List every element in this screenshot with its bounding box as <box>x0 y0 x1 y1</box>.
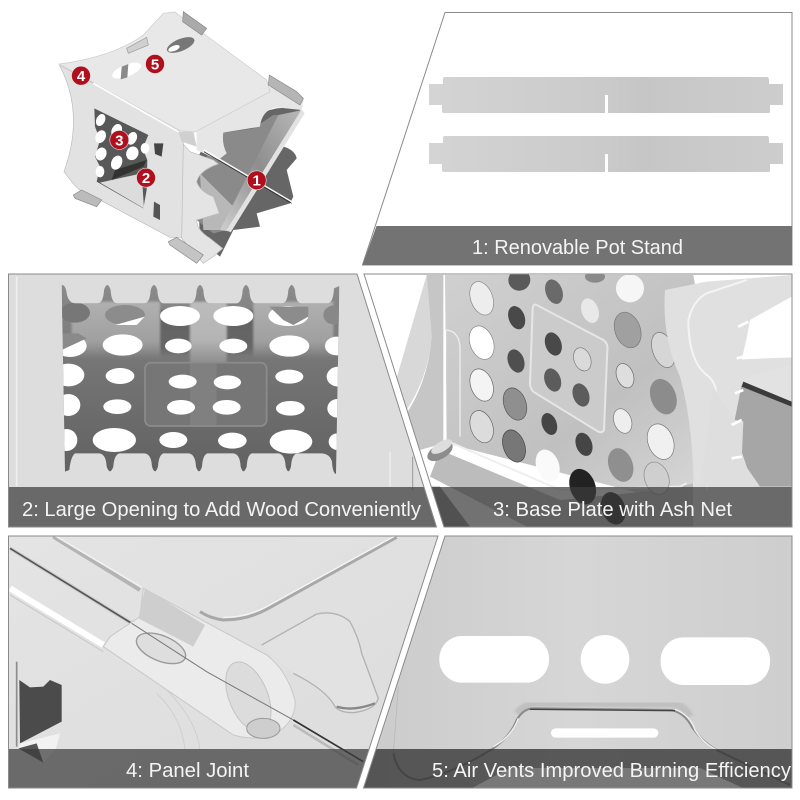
marker 1 <box>247 171 266 190</box>
illustration: folding stove with numbered callouts <box>59 12 305 263</box>
air vent left <box>439 636 549 683</box>
panel 3: base plate with ash net <box>397 274 792 526</box>
marker 2: 2 <box>142 170 150 187</box>
caption 5: 5: Air Vents Improved Burning Efficiency <box>432 760 791 782</box>
pot stand plate top <box>429 77 783 113</box>
caption bar 1 <box>362 226 792 265</box>
caption 2: 2: Large Opening to Add Wood Conveniently <box>22 499 421 521</box>
caption bar 2 <box>8 487 438 527</box>
stove body <box>59 12 305 263</box>
caption 3: 3: Base Plate with Ash Net <box>493 499 732 521</box>
metal plate <box>397 274 792 526</box>
marker 3: 3 <box>115 132 123 149</box>
handle edge <box>393 708 790 785</box>
handle halo <box>517 703 690 717</box>
opening with ash net <box>17 277 413 490</box>
caption bar 4 <box>9 749 368 788</box>
caption 1: 1: Renovable Pot Stand <box>472 237 683 259</box>
joint detail <box>10 535 397 765</box>
marker 4: 4 <box>77 68 86 85</box>
handle slot <box>551 728 658 738</box>
air vent centre <box>581 635 629 684</box>
panel 4: panel joint <box>8 535 440 789</box>
pot stand plate bottom <box>429 136 783 172</box>
marker 2 <box>136 168 156 187</box>
caption bar 3 <box>432 487 792 526</box>
air vent right <box>661 637 770 685</box>
panel 2: large opening <box>8 274 438 528</box>
caption 4: 4: Panel Joint <box>126 760 249 782</box>
marker 5: 5 <box>151 56 159 73</box>
marker 4 <box>72 66 90 85</box>
marker 3 <box>110 130 129 150</box>
marker 5 <box>146 54 164 74</box>
marker 1: 1 <box>253 173 261 190</box>
panel 1: removable pot stand <box>362 12 792 265</box>
panel 5: air vents <box>360 536 794 789</box>
caption bar 5 <box>360 749 794 789</box>
